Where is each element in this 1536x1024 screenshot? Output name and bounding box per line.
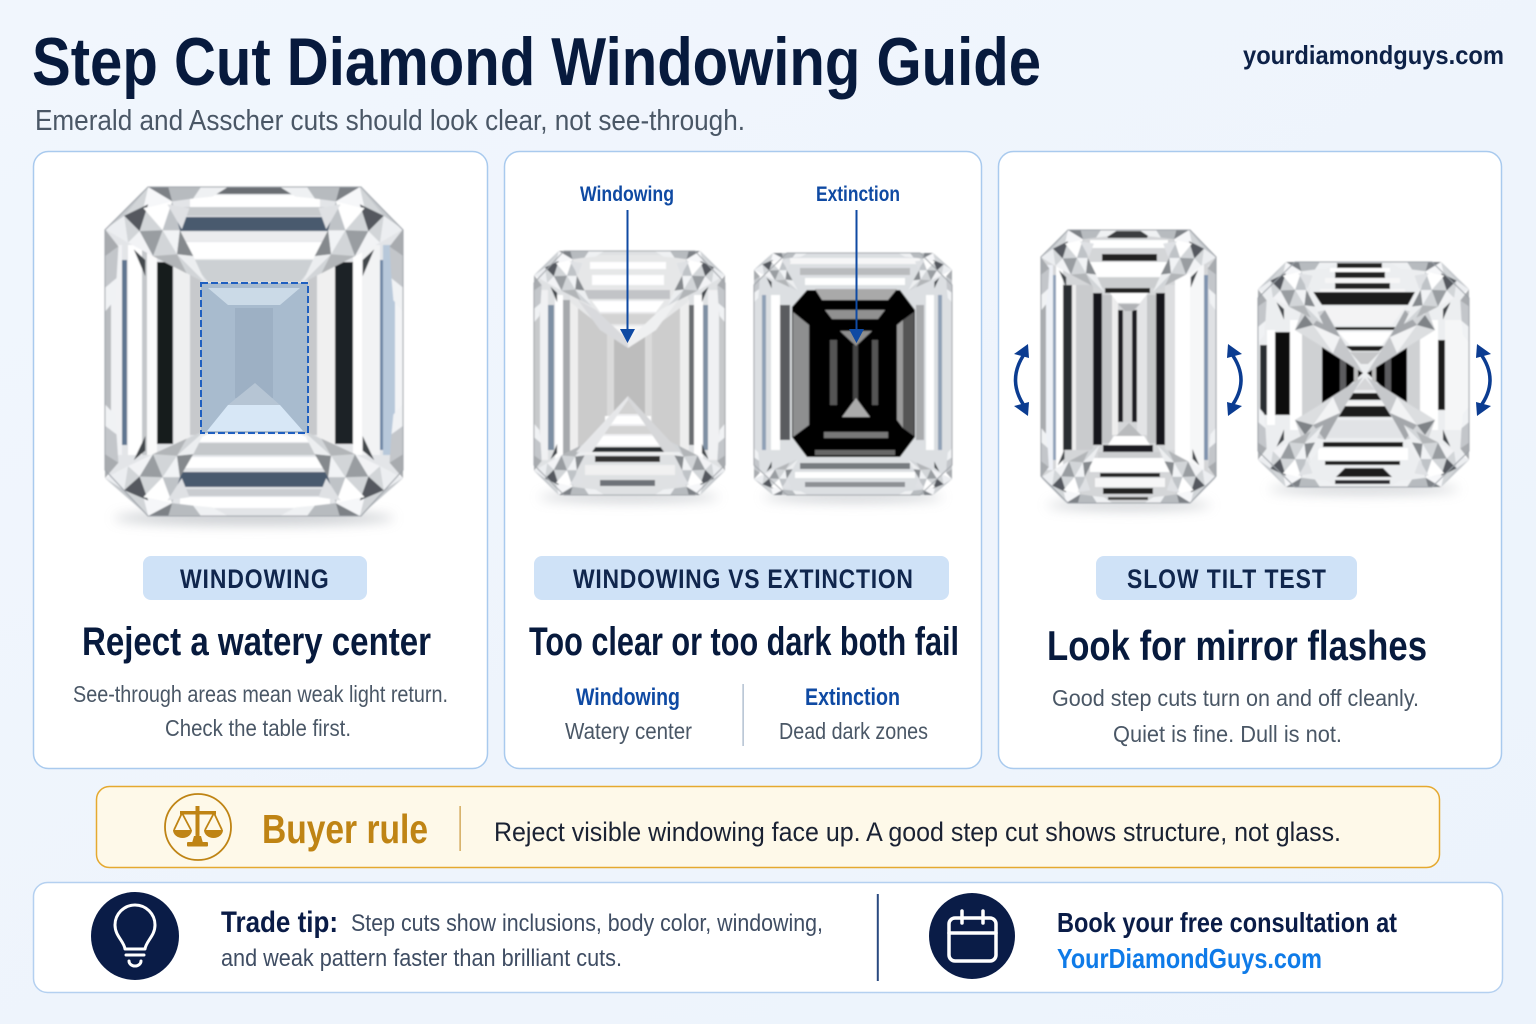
table window bbox=[201, 283, 308, 433]
comparison: windowing: Windowing bbox=[576, 684, 680, 711]
label pill bbox=[143, 556, 367, 600]
diamond: windowing bbox=[534, 251, 725, 502]
label pill: WINDOWING bbox=[180, 564, 329, 594]
diamond: extinction bbox=[754, 253, 952, 502]
body text: Good step cuts turn on and off cleanly. bbox=[1052, 685, 1419, 711]
website url: yourdiamondguys.com bbox=[1243, 40, 1504, 70]
arrow: tilt right bbox=[1476, 344, 1491, 416]
consultation call to action: YourDiamondGuys.com bbox=[1057, 943, 1322, 974]
comparison: extinction bbox=[779, 684, 928, 744]
heading: Too clear or too dark both fail bbox=[529, 620, 959, 664]
panel: footer bbox=[34, 882, 1502, 992]
comparison: extinction: Dead dark zones bbox=[779, 718, 928, 744]
diamond with highlighted table bbox=[105, 187, 403, 525]
buyer rule label: Buyer rule bbox=[262, 806, 428, 852]
body text: See-through areas mean weak light return. bbox=[73, 681, 448, 707]
comparison: windowing bbox=[565, 684, 692, 744]
trade tip: and weak pattern faster than brilliant cuts. bbox=[221, 945, 622, 972]
consultation call to action bbox=[1057, 907, 1397, 974]
arrow: tilt left bbox=[1014, 344, 1029, 416]
trade tip: Trade tip: bbox=[221, 906, 338, 939]
heading: Look for mirror flashes bbox=[1047, 622, 1427, 669]
label pill: SLOW TILT TEST bbox=[1127, 564, 1327, 594]
panel: buyer rule bbox=[96, 786, 1440, 868]
label pill bbox=[1096, 556, 1357, 600]
comparison: windowing: Watery center bbox=[565, 718, 692, 744]
label pill bbox=[534, 556, 949, 600]
comparison: extinction: Extinction bbox=[805, 684, 900, 711]
buyer rule text: Reject visible windowing face up. A good step cut shows structure, not glass. bbox=[494, 817, 1341, 847]
icon: calendar bbox=[929, 893, 1015, 979]
panel: windowing bbox=[34, 152, 488, 768]
subtitle: Emerald and Asscher cuts should look clear, not see-through. bbox=[35, 105, 745, 137]
body text: Check the table first. bbox=[165, 715, 351, 741]
arrow: windowing bbox=[620, 210, 635, 343]
label pill: WINDOWING VS EXTINCTION bbox=[573, 564, 913, 594]
body text bbox=[1052, 685, 1419, 747]
trade tip: Step cuts show inclusions, body color, windowing, bbox=[351, 910, 823, 937]
callout label: extinction: Extinction bbox=[816, 183, 900, 206]
icon: balance scale bbox=[165, 794, 231, 860]
arrow: extinction bbox=[849, 210, 864, 343]
icon: light bulb bbox=[91, 892, 179, 980]
consultation call to action: Book your free consultation at bbox=[1057, 907, 1397, 938]
heading: Reject a watery center bbox=[82, 620, 431, 664]
body text: Quiet is fine. Dull is not. bbox=[1113, 721, 1342, 747]
diamond: asscher cut bbox=[1258, 262, 1469, 494]
arrow: tilt middle bbox=[1227, 344, 1242, 416]
panel: windowing vs extinction bbox=[504, 152, 982, 768]
diamond: emerald cut bbox=[1041, 230, 1216, 510]
panel: slow tilt test bbox=[998, 152, 1502, 768]
title: Step Cut Diamond Windowing Guide bbox=[32, 24, 1041, 100]
callout label: windowing: Windowing bbox=[580, 183, 674, 206]
body text bbox=[73, 681, 448, 741]
trade tip bbox=[221, 906, 823, 972]
